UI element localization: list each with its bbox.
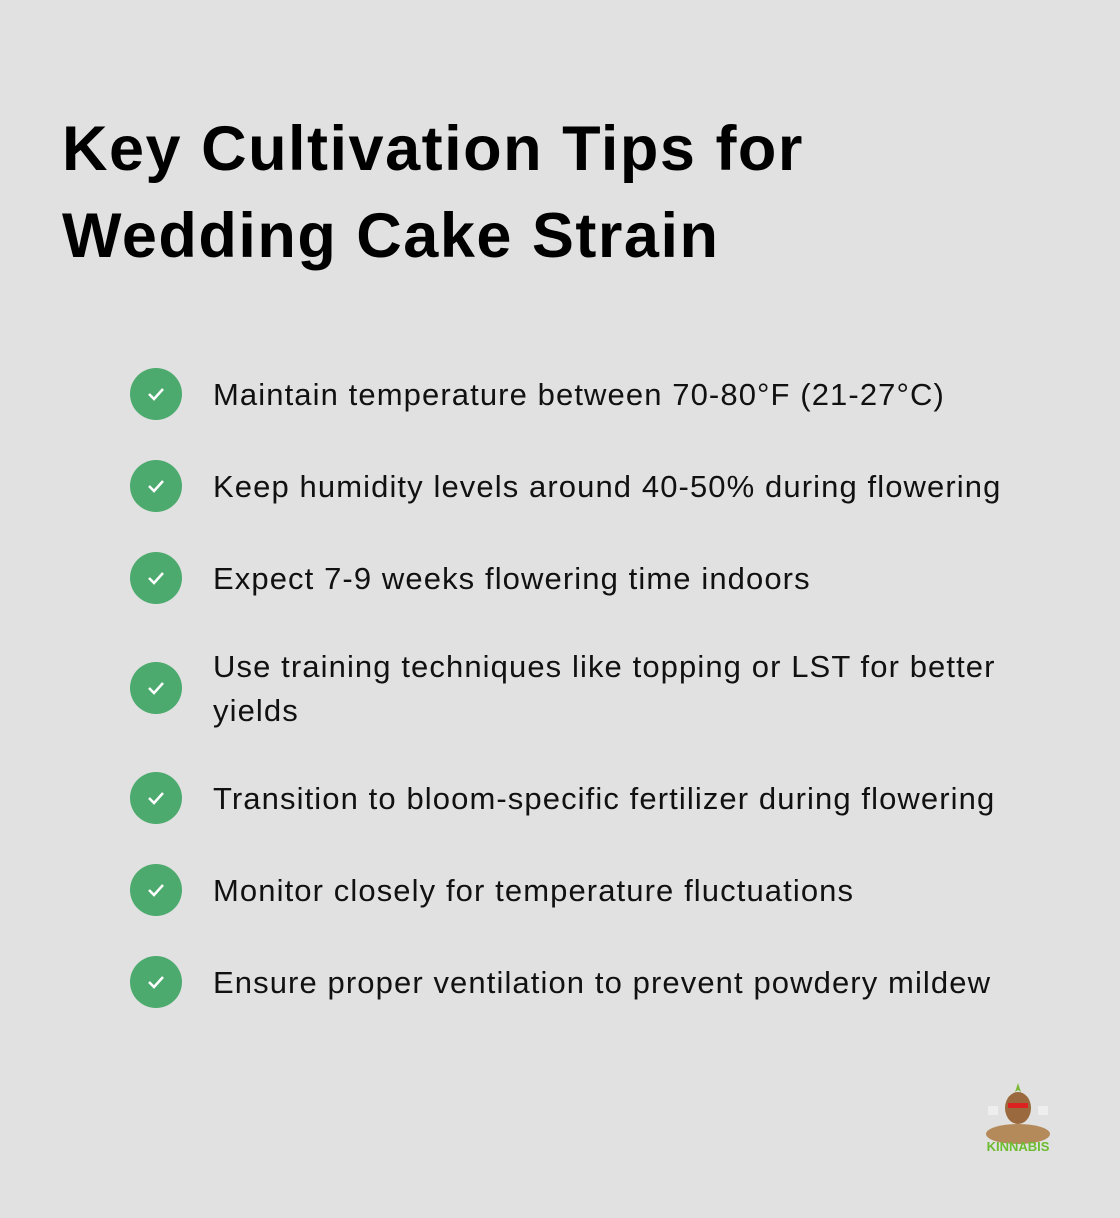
title: Wedding Cake Strain (62, 201, 719, 271)
logo: KINNABIS (987, 1139, 1050, 1154)
item 4: Use training techniques like topping or LST for better (213, 649, 996, 684)
logo (986, 1083, 1050, 1154)
item 5: Transition to bloom-specific fertilizer during flowering (213, 781, 995, 816)
item 6: Monitor closely for temperature fluctuations (213, 873, 854, 908)
title: Key Cultivation Tips for (62, 114, 804, 184)
item 3 (130, 552, 811, 604)
item 1 (130, 368, 945, 420)
item 7 (130, 956, 991, 1008)
item 4: yields (213, 693, 299, 728)
item 2 (130, 460, 1001, 512)
item 3: Expect 7-9 weeks flowering time indoors (213, 561, 811, 596)
item 2: Keep humidity levels around 40-50% during flowering (213, 469, 1001, 504)
item 4 (130, 649, 996, 728)
title (62, 114, 804, 271)
item 1: Maintain temperature between 70-80°F (21-27°C) (213, 377, 945, 412)
item 5 (130, 772, 995, 824)
item 7: Ensure proper ventilation to prevent powdery mildew (213, 965, 991, 1000)
item 6 (130, 864, 854, 916)
